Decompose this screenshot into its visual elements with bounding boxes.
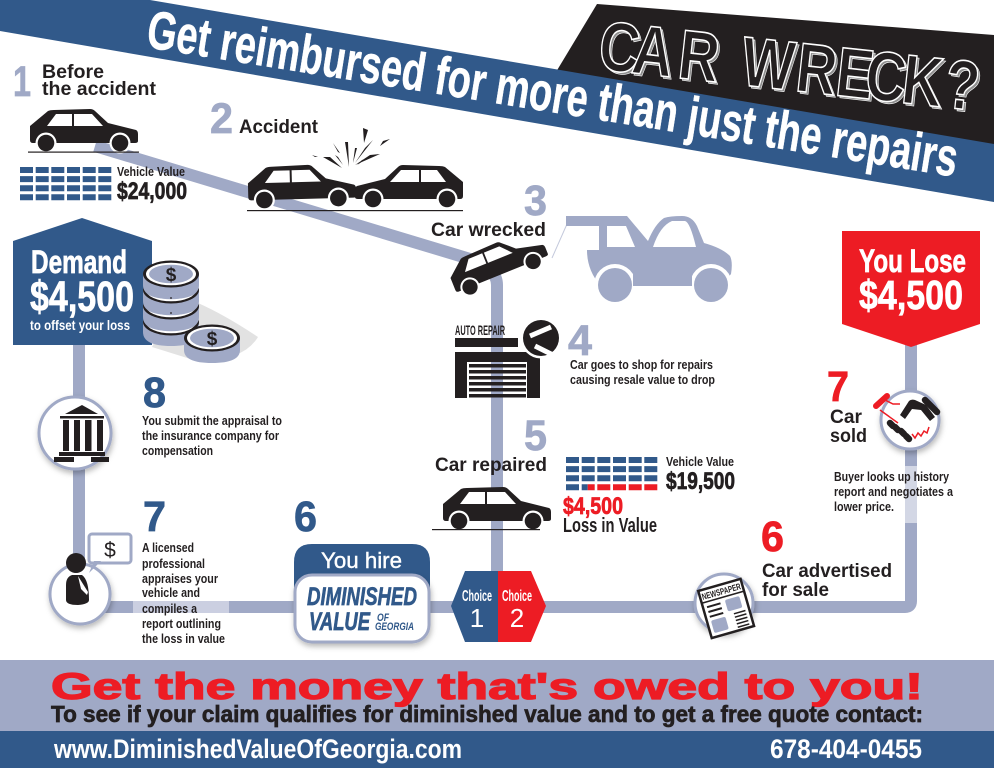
icon: auto repair garage: AUTO REPAIR <box>455 322 505 338</box>
vehicle value text: $24,000 <box>117 178 187 205</box>
step 6 right: car advertised: for sale <box>762 580 829 601</box>
step 6 right: car advertised <box>761 513 892 601</box>
step 3: car wrecked: 3 <box>524 177 547 225</box>
black title panel <box>556 4 994 146</box>
step 7 right: car sold <box>827 363 954 514</box>
step 7 text: appraises your <box>142 571 218 586</box>
step 7 text: the loss in value <box>142 631 225 646</box>
call to action band: Get the money that's owed to you! <box>51 666 923 707</box>
step 7 text: professional <box>142 556 205 571</box>
choice 1: Choice <box>462 588 492 605</box>
title banner <box>0 0 994 202</box>
step 2: accident: Accident <box>239 117 319 138</box>
contact footer: 678-404-0455 <box>770 734 922 764</box>
Car Wreck heading: CAR WRECK? <box>595 8 984 126</box>
vehicle value text: $19,500 <box>666 468 735 495</box>
step 7 text: vehicle and <box>142 585 200 600</box>
step 4 text: causing resale value to drop <box>570 372 715 387</box>
choice 2: 2 <box>510 603 524 633</box>
icon: coin stack: $ <box>166 265 177 286</box>
value bars $24,000 <box>20 167 111 200</box>
demand sign: Demand <box>31 244 127 280</box>
step 6: you hire: 6 <box>294 493 317 541</box>
loss in value text <box>563 493 657 537</box>
icon: auto repair garage <box>455 318 562 398</box>
vehicle value text: Vehicle Value <box>666 454 734 469</box>
step 7: licensed appraiser: 7 <box>143 493 166 541</box>
step 7 right text: report and negotiates a <box>834 484 954 499</box>
step 7 right text: lower price. <box>834 499 894 514</box>
step 7 text: report outlining <box>142 616 221 631</box>
Diminished Value of Georgia logo: VALUE <box>309 608 371 636</box>
step 2: accident: 2 <box>210 95 233 143</box>
vehicle value text <box>666 454 735 495</box>
value bars $19,500 <box>566 457 657 490</box>
icon: tow truck <box>552 216 732 306</box>
choice 2 <box>498 571 546 642</box>
icon: appraiser <box>50 534 131 624</box>
step 6 right: car advertised: Car advertised <box>762 561 892 582</box>
vehicle value text: Vehicle Value <box>117 164 185 179</box>
step 8: submit appraisal: 8 <box>143 369 166 417</box>
step 6: you hire <box>294 493 430 642</box>
step 5: car repaired: Car repaired <box>435 455 547 476</box>
Diminished Value of Georgia logo <box>307 583 417 636</box>
step 3: car wrecked <box>431 177 732 306</box>
contact footer <box>0 731 994 768</box>
vehicle value text <box>117 164 187 205</box>
Diminished Value of Georgia logo: DIMINISHED <box>307 583 417 611</box>
choice 1 <box>451 571 498 642</box>
call to action band <box>0 660 994 731</box>
impact sparks <box>312 128 390 168</box>
step 3: car wrecked: Car wrecked <box>431 220 546 241</box>
step 7 text: compiles a <box>142 601 198 616</box>
you hire badge: You hire <box>321 548 402 573</box>
demand sign <box>13 218 152 345</box>
Diminished Value of Georgia logo: OF <box>377 612 389 624</box>
icon: coin stack <box>143 260 258 363</box>
step 2: accident <box>210 95 463 211</box>
step 4: repair shop: 4 <box>568 317 592 365</box>
loss in value text: Loss in Value <box>563 515 657 537</box>
step 7 text: A licensed <box>142 540 194 555</box>
route line <box>79 146 911 607</box>
demand sign: to offset your loss <box>30 317 130 333</box>
step 6 right: car advertised: 6 <box>761 513 784 561</box>
step 7 right: car sold: 7 <box>827 363 849 411</box>
loss in value text: $4,500 <box>563 493 623 520</box>
icon: handshake <box>876 391 939 449</box>
step 8 text: compensation <box>142 443 213 458</box>
choice 1: 1 <box>470 603 484 633</box>
step 7: licensed appraiser <box>50 493 225 646</box>
step 7 right text <box>834 469 954 514</box>
step 5: car repaired <box>432 412 735 537</box>
icon: coin stack: $ <box>207 329 218 350</box>
call to action band: To see if your claim qualifies for diminished value and to get a free quote contact: <box>51 701 923 727</box>
step 7 right: car sold: Car <box>830 407 863 428</box>
step 8: submit appraisal <box>39 369 282 469</box>
step 4 text: Car goes to shop for repairs <box>570 357 713 372</box>
icon: tilted wrecked car <box>445 226 552 301</box>
you hire badge <box>294 544 430 642</box>
icon: car <box>28 109 139 154</box>
step 7 text <box>142 540 225 646</box>
icon: colliding cars <box>247 128 463 211</box>
you lose sign: $4,500 <box>859 272 963 318</box>
step 7 right text: Buyer looks up history <box>834 469 950 484</box>
icon: repaired car <box>432 487 551 532</box>
step 1: before the accident <box>13 58 187 205</box>
step 1 label: Before <box>42 62 104 83</box>
icon: bank building <box>39 397 111 469</box>
step 8 text: You submit the appraisal to <box>142 413 282 428</box>
step 4 text <box>570 357 715 387</box>
icon: newspaper: NEWSPAPER <box>701 581 742 602</box>
step 7 right: car sold: sold <box>830 426 867 447</box>
icon: appraiser: $ <box>104 539 116 562</box>
step 1 label <box>42 62 157 100</box>
step 1: before the accident: 1 <box>13 58 31 106</box>
contact footer: www.DiminishedValueOfGeorgia.com <box>53 734 462 764</box>
step 8 text: the insurance company for <box>142 428 279 443</box>
step 5: car repaired: 5 <box>524 412 547 460</box>
icon: newspaper <box>695 574 754 638</box>
step 4: repair shop <box>455 317 715 398</box>
you lose sign <box>842 231 980 347</box>
step 1 label: the accident <box>42 79 157 100</box>
choice 2: Choice <box>502 588 532 605</box>
step 8 text <box>142 413 282 458</box>
demand sign: $4,500 <box>30 273 134 321</box>
choice hexagon <box>451 571 546 642</box>
Car Wreck heading: CAR WRECK? <box>597 10 986 129</box>
Diminished Value of Georgia logo: GEORGIA <box>375 621 414 633</box>
